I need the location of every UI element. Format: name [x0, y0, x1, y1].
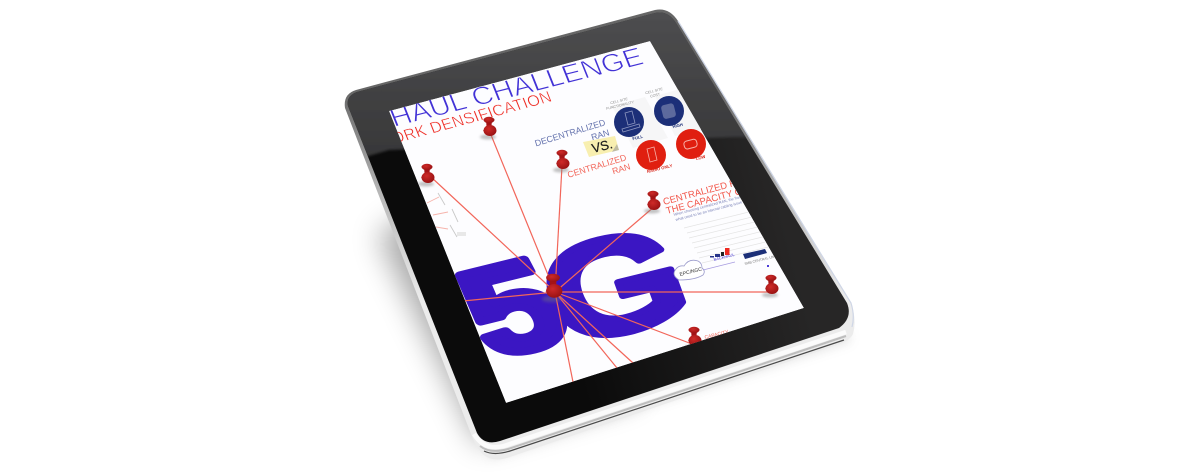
- label: decentralized ran: DECENTRALIZED: [534, 117, 607, 148]
- subtitle: work densification: WORK DENSIFICATION: [374, 89, 554, 152]
- column label: cell site functionality: FUNCTIONALITY: [606, 100, 635, 111]
- lower dark seam: [484, 340, 844, 454]
- silver rim: [345, 9, 855, 459]
- cell backgrounds: [612, 97, 668, 148]
- legend dot: [767, 265, 769, 267]
- label: decentralized ran: RAN: [590, 127, 611, 142]
- section heading: centralized ran capacity: CENTRALIZED RAN: [662, 174, 751, 208]
- pin label: bottom: CAPACITY: [704, 329, 730, 341]
- pin: bottom: [685, 327, 702, 350]
- vs sticky note: [583, 136, 619, 157]
- column label: cell site cost: COST: [650, 92, 661, 99]
- value label: low: LOW: [695, 154, 706, 161]
- drop shadow: [378, 180, 850, 458]
- label: centralized ran: CENTRALIZED: [566, 152, 628, 180]
- icon: low cost: [676, 129, 706, 159]
- pin: centre-top: [553, 150, 570, 172]
- icon: full functionality: [614, 107, 644, 137]
- pin: right-upper: [644, 191, 660, 214]
- section body text: When choosing centralized RAN, the fronthaul becomes: [673, 189, 765, 217]
- value label: full: FULL: [632, 134, 644, 141]
- thin bright right edge: [678, 21, 853, 327]
- pin: left: [418, 164, 434, 186]
- numeral 5: 5: [436, 232, 590, 385]
- pin: top: [480, 117, 496, 140]
- pin: hub: [542, 274, 562, 302]
- left mini diagram: [427, 193, 466, 237]
- chart caption: 5MB CENTRAL UNIT: [744, 254, 779, 266]
- value label: high: HIGH: [672, 122, 683, 129]
- icon: high cost: [654, 96, 684, 126]
- pin: right: [762, 275, 778, 298]
- lower white band: [474, 332, 846, 447]
- 5G wordmark: [455, 233, 686, 356]
- screen background: [389, 41, 804, 403]
- chart label pill: [743, 249, 767, 259]
- cloud: epc/ngc: EPC/NGC: [679, 267, 703, 278]
- tablet body: [340, 0, 870, 459]
- column label: cell site cost: CELL SITE: [645, 87, 664, 95]
- icon: radio only: [636, 140, 666, 170]
- bezel gloss: [348, 12, 746, 157]
- chart label: bar: BACKHAUL: [713, 252, 736, 262]
- vs sticky note: VS.: [590, 136, 614, 156]
- section heading: centralized ran capacity: [663, 180, 739, 214]
- screen: [374, 41, 804, 403]
- label: centralized ran: RAN: [611, 161, 632, 176]
- cell site columns: [605, 87, 706, 174]
- chart bars: [710, 248, 730, 258]
- value label: radio only: RADIO ONLY: [646, 163, 673, 174]
- black bezel: [348, 12, 849, 442]
- capacity chart: [684, 212, 774, 267]
- cloud: epc/ngc: [674, 260, 735, 280]
- chart grid: [684, 212, 769, 264]
- column label: cell site functionality: CELL SITE: [610, 97, 629, 105]
- title: haul challenge: HAUL CHALLENGE: [385, 41, 647, 133]
- lower grey band: [480, 336, 846, 451]
- section body text: what used to be an internal cabling issue at the site: [675, 196, 759, 222]
- connector lines: [431, 130, 772, 382]
- letter G: G: [520, 196, 708, 375]
- section heading: centralized ran capacity: THE CAPACITY CHALLENGE: [665, 173, 792, 217]
